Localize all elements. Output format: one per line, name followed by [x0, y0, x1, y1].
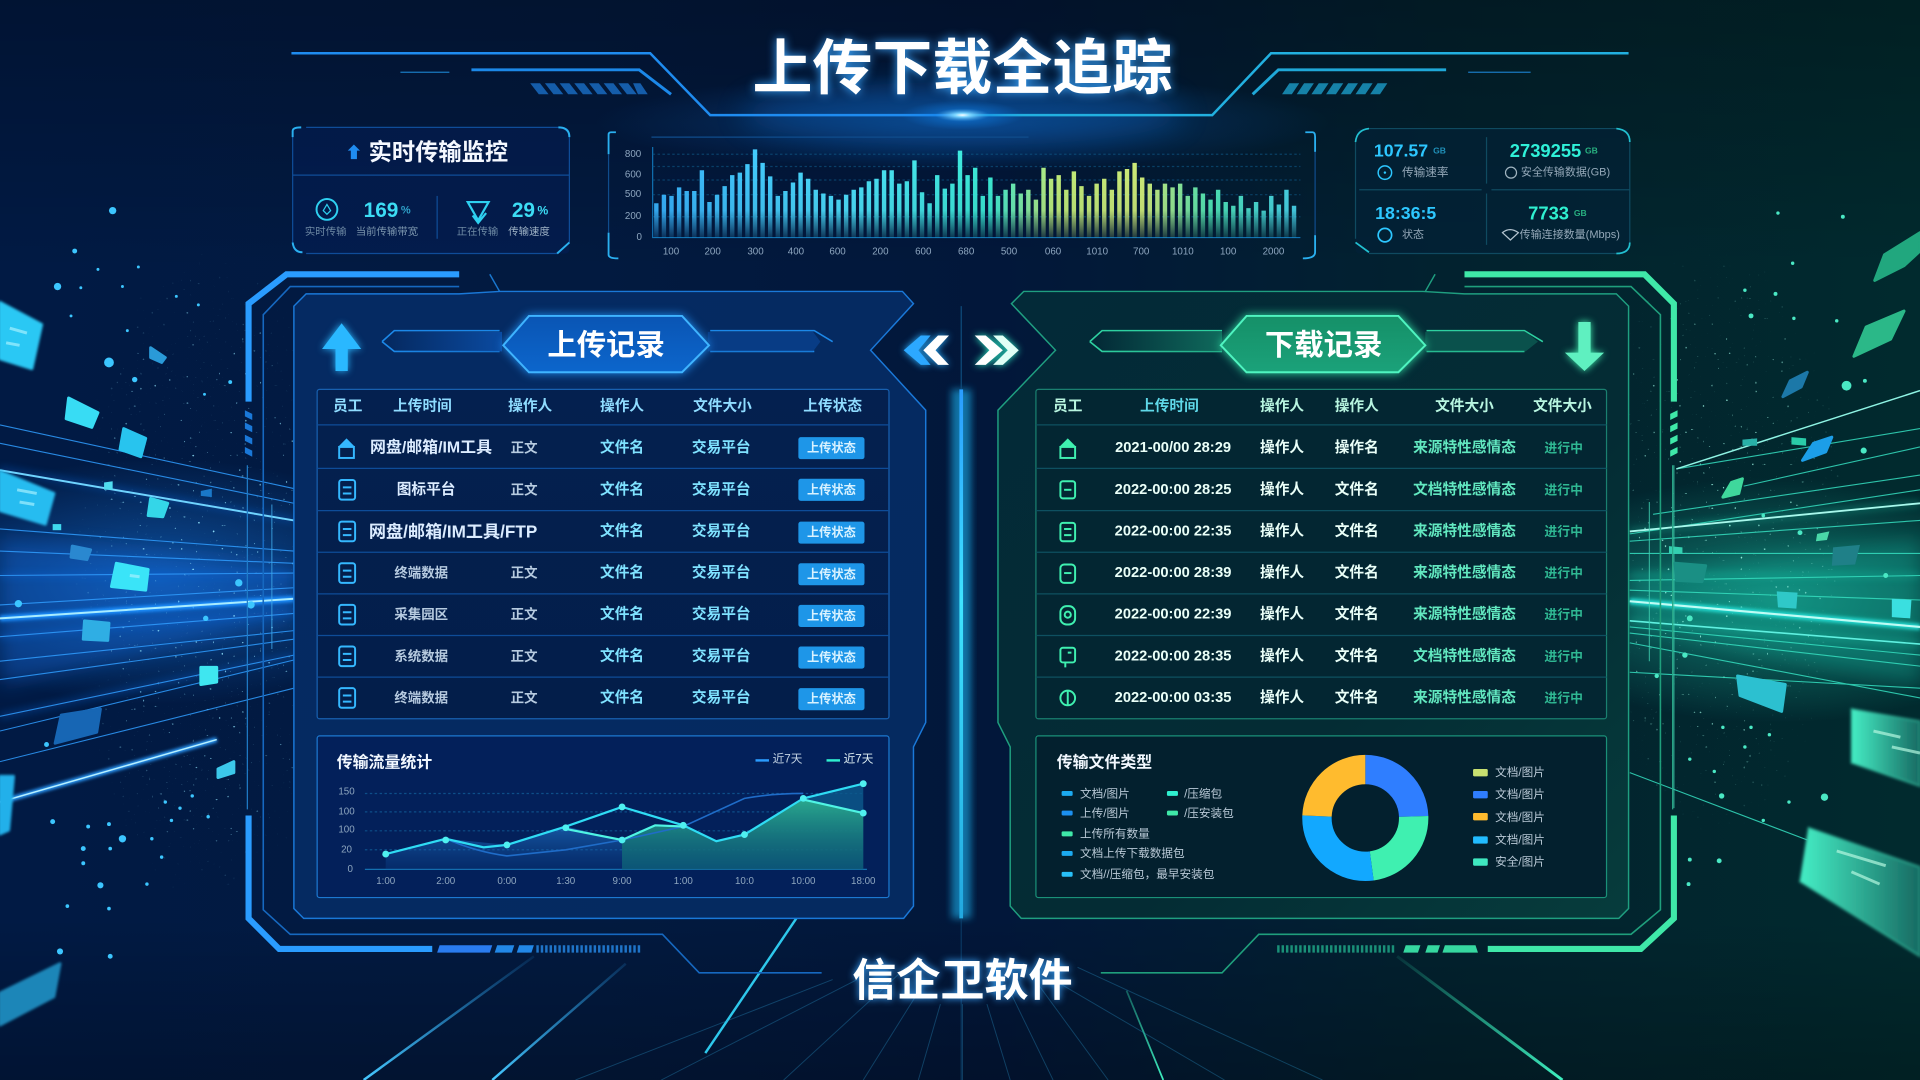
x axis labels: 1010 [1172, 247, 1194, 258]
floating file cards left [0, 302, 234, 1025]
row 6: 上传状态 [807, 650, 856, 665]
x axis labels: 1010 [1086, 247, 1109, 258]
row 4: 正文 [511, 565, 538, 581]
header row: 操作人 [1260, 397, 1304, 415]
row 2: 图标平台 [397, 480, 456, 498]
heading: file types: 传输文件类型 [1057, 752, 1152, 771]
stat: speed: 107.57 GB [1374, 141, 1446, 161]
row 1 [1059, 438, 1583, 458]
y axis labels: 800 [625, 149, 642, 160]
x axis labels: 680 [958, 247, 975, 258]
y labels: 100 [338, 806, 355, 817]
row 7: 2022-00:00 03:35 [1115, 690, 1231, 706]
heading: traffic: 传输流量统计 [337, 752, 432, 771]
footer brand: 信企卫软件 [852, 956, 1073, 1005]
row 1: 交易平台 [692, 438, 751, 456]
center divider with chevrons [904, 306, 1019, 1080]
x axis labels: 300 [747, 247, 764, 258]
row 2: 交易平台 [692, 480, 751, 498]
outer frame left [245, 274, 822, 973]
row 6: 文档特性感情态 [1413, 646, 1516, 664]
legend left: /压缩包 [1184, 787, 1223, 801]
row 5: 文件名 [1335, 605, 1379, 623]
x axis labels: 700 [1133, 247, 1150, 258]
row 1: 进行中 [1544, 441, 1583, 456]
icon: upload [348, 144, 360, 159]
row 6: 文件名 [1335, 646, 1379, 664]
metric: bandwidth: 当前传输带宽 [356, 225, 418, 238]
row 1: 正文 [511, 440, 538, 456]
left header lines [291, 53, 962, 115]
row 1: 上传状态 [807, 440, 856, 455]
x axis labels: 060 [1045, 247, 1062, 258]
row 6 [339, 646, 864, 669]
x axis labels: 200 [872, 247, 889, 258]
right data stream [1629, 211, 1920, 956]
row 4: 文件名 [1335, 563, 1379, 581]
header row: 操作人 [1335, 397, 1379, 415]
title: 上传下载全追踪 [752, 35, 1172, 102]
panel: download records [998, 274, 1678, 973]
x labels [376, 876, 876, 887]
metric: bandwidth: 实时传输 [305, 225, 347, 238]
x axis labels: 2000 [1263, 247, 1285, 258]
row 2: 正文 [511, 481, 538, 497]
panel: realtime monitor [293, 127, 569, 253]
table: download [1036, 389, 1607, 719]
x labels: 0:00 [497, 876, 517, 887]
row 3: 交易平台 [692, 521, 751, 539]
row 4 [339, 563, 864, 585]
row 5 [1060, 605, 1583, 624]
badge: download records [1090, 316, 1543, 372]
row 6: 正文 [511, 648, 538, 664]
row 3 [1060, 521, 1583, 541]
row 3 [339, 521, 864, 544]
bars [656, 149, 1294, 238]
row 7: 进行中 [1544, 690, 1583, 705]
stat: volume: 安全传输数据(GB) [1521, 165, 1610, 179]
row 2: 2022-00:00 28:25 [1115, 482, 1231, 498]
row 3: 来源特性感情态 [1413, 521, 1516, 539]
panel: transfer stats [1356, 129, 1630, 253]
icon: down arrow [1565, 322, 1604, 371]
stat: speed [1374, 141, 1449, 179]
badge: upload records: 上传记录 [547, 329, 665, 362]
row 6: 进行中 [1544, 649, 1583, 664]
y axis labels: 0 [636, 232, 642, 243]
y axis labels: 500 [625, 189, 642, 200]
heading: realtime monitor: 实时传输监控 [369, 139, 508, 165]
row 6: 文件名 [600, 646, 644, 664]
row 4: 2022-00:00 28:39 [1115, 565, 1231, 581]
row 7: 操作人 [1260, 688, 1304, 706]
stat: connections: 传输连接数量(Mbps) [1520, 227, 1620, 241]
x axis labels: 600 [829, 247, 846, 258]
row 5: 上传状态 [807, 608, 856, 623]
row 6 [1060, 646, 1583, 667]
row 4: 终端数据 [394, 565, 448, 581]
table: upload [317, 389, 889, 719]
panel: bar chart [609, 132, 1315, 258]
data points [382, 780, 867, 858]
series A [386, 784, 863, 854]
x labels: 9:00 [613, 876, 632, 887]
left data stream [0, 207, 300, 1025]
row 7: 文件名 [1335, 688, 1379, 706]
row 4: 上传状态 [807, 566, 856, 581]
row 6: 系统数据 [394, 648, 448, 664]
row 5: 交易平台 [692, 605, 751, 623]
y labels: 0 [347, 864, 353, 875]
x axis labels: 400 [788, 247, 805, 258]
x labels: 1:00 [376, 876, 396, 887]
legend right: 文档/图片 [1495, 787, 1545, 801]
areas [386, 827, 622, 869]
legend left: 文档/图片 [1080, 787, 1130, 801]
stat: connections: 7733 GB [1528, 203, 1587, 224]
stat: volume [1506, 140, 1610, 179]
row 5: 进行中 [1544, 607, 1583, 622]
legend left: 文档上传下载数据包 [1080, 846, 1185, 860]
legend right: 文档/图片 [1495, 810, 1545, 824]
chart legend [756, 753, 874, 766]
metric: rate [457, 199, 550, 238]
row 3: 网盘/邮箱/IM工具/FTP [369, 521, 537, 541]
stat: time: 状态 [1402, 227, 1424, 241]
legend right [1473, 765, 1545, 869]
panel: traffic line chart [317, 736, 889, 898]
row 3: 进行中 [1544, 524, 1583, 539]
x labels: 2:00 [436, 876, 456, 887]
floating file cards right [1669, 233, 1920, 956]
y labels: 20 [341, 844, 353, 855]
row 7: 终端数据 [394, 689, 448, 705]
panel body [294, 291, 926, 918]
x axis labels: 500 [1001, 247, 1018, 258]
header row [333, 397, 862, 415]
row 6: 操作人 [1260, 646, 1304, 664]
row 4: 文件名 [600, 563, 644, 581]
y axis labels: 600 [625, 170, 642, 181]
legend left: 上传/图片 [1080, 806, 1130, 820]
chart legend: 近7天 [773, 753, 803, 766]
metric: rate: 正在传输 [457, 225, 499, 238]
row 5 [339, 605, 864, 627]
row 6: 交易平台 [692, 646, 751, 664]
metric: bandwidth [305, 199, 418, 238]
row 5: 操作人 [1260, 605, 1304, 623]
x axis labels: 100 [663, 247, 680, 258]
row 7: 正文 [511, 689, 538, 705]
header row: 文件大小 [1533, 397, 1592, 415]
row 2: 操作人 [1260, 480, 1304, 498]
donut chart [1317, 770, 1414, 866]
row 5: 文件名 [600, 605, 644, 623]
x axis labels: 200 [704, 247, 721, 258]
legend left: /压安装包 [1184, 806, 1234, 820]
row 1: 操作人 [1260, 438, 1304, 456]
legend right: 文档/图片 [1495, 765, 1545, 779]
row 3: 文件名 [1335, 521, 1379, 539]
row 1: 来源特性感情态 [1413, 438, 1516, 456]
badge: download records: 下载记录 [1265, 329, 1382, 362]
metric: bandwidth: 169 % [364, 199, 411, 222]
x labels: 1:30 [556, 876, 576, 887]
legend right: 文档/图片 [1495, 832, 1545, 847]
row 3: 2022-00:00 22:35 [1115, 523, 1231, 539]
row 7: 交易平台 [692, 688, 751, 706]
panel: upload records [245, 274, 926, 973]
badge: upload records [382, 316, 833, 372]
header row [1053, 397, 1592, 415]
legend left [1062, 787, 1234, 881]
header row: 文件大小 [693, 397, 752, 415]
row 5: 正文 [511, 606, 538, 622]
row 2: 文件名 [1335, 480, 1379, 498]
x axis labels: 100 [1220, 247, 1237, 258]
x labels: 18:00 [851, 876, 876, 887]
row 7 [339, 688, 864, 710]
row 2: 文档特性感情态 [1413, 480, 1516, 498]
header row: 文件大小 [1435, 397, 1494, 415]
x labels: 10:00 [791, 876, 816, 887]
row 4: 进行中 [1544, 566, 1583, 581]
chevrons left [904, 336, 949, 365]
legend left: 上传所有数量 [1080, 826, 1150, 840]
row 1: 2021-00/00 28:29 [1115, 440, 1231, 456]
header frame [291, 53, 1629, 146]
row 7 [1060, 688, 1583, 706]
y labels: 150 [338, 787, 355, 798]
row 2 [1060, 480, 1583, 498]
bottom perspective rays [364, 917, 1562, 1080]
chart legend: 近7天 [844, 753, 874, 766]
legend left: 文档//压缩包，最早安装包 [1080, 867, 1215, 881]
panel: file types [1036, 736, 1607, 898]
row 6: 2022-00:00 28:35 [1115, 648, 1231, 664]
y labels: 100 [338, 825, 355, 836]
row 5: 来源特性感情态 [1413, 605, 1516, 623]
row 1 [338, 437, 864, 459]
row 5: 2022-00:00 22:39 [1115, 607, 1231, 623]
metric: rate: 29% [512, 199, 548, 222]
header row: 员工 [333, 398, 363, 415]
row 3: 操作人 [1260, 521, 1304, 539]
x labels: 1:00 [674, 876, 693, 887]
hatch decorations [530, 83, 648, 94]
row 7: 上传状态 [807, 691, 856, 706]
stat: time [1375, 203, 1436, 242]
series B [566, 800, 863, 840]
row 5: 采集园区 [394, 606, 448, 622]
stat: speed: 传输速率 [1402, 165, 1449, 179]
row 1: 网盘/邮箱/IM工具 [370, 438, 492, 457]
stat: connections [1502, 203, 1620, 241]
y labels [338, 787, 355, 875]
metric: rate: 传输速度 [508, 225, 550, 238]
row 2 [339, 479, 864, 501]
y axis labels [625, 149, 642, 243]
panel body [998, 291, 1629, 918]
stat: volume: 2739255 GB [1510, 140, 1598, 161]
header row: 操作人 [508, 397, 553, 415]
chevrons right [975, 336, 1019, 365]
row 1: 文件名 [600, 438, 644, 456]
right header lines [962, 53, 1629, 115]
header row: 上传状态 [803, 397, 862, 415]
row 4: 操作人 [1260, 563, 1304, 581]
header row: 操作人 [600, 397, 644, 415]
stat: time: 18:36:5 [1375, 203, 1436, 223]
header row: 员工 [1053, 398, 1083, 415]
y axis labels: 200 [625, 211, 642, 222]
row 4 [1060, 563, 1583, 583]
row 1: 操作名 [1335, 438, 1379, 456]
outer frame right [1101, 274, 1678, 973]
x labels: 10:0 [735, 876, 755, 887]
legend right: 安全/图片 [1495, 855, 1545, 869]
row 7: 文件名 [600, 688, 644, 706]
row 2: 进行中 [1544, 482, 1583, 497]
row 3: 上传状态 [807, 525, 856, 540]
icon: up arrow [322, 323, 361, 371]
row 3: 文件名 [600, 521, 644, 539]
header row: 上传时间 [393, 398, 452, 415]
x axis labels: 600 [915, 247, 932, 258]
header row: 上传时间 [1140, 398, 1199, 415]
row 2: 上传状态 [807, 482, 856, 497]
row 7: 来源特性感情态 [1413, 688, 1516, 706]
row 2: 文件名 [600, 480, 644, 498]
row 4: 交易平台 [692, 563, 751, 581]
row 4: 来源特性感情态 [1413, 563, 1516, 581]
x axis labels [663, 247, 1285, 258]
